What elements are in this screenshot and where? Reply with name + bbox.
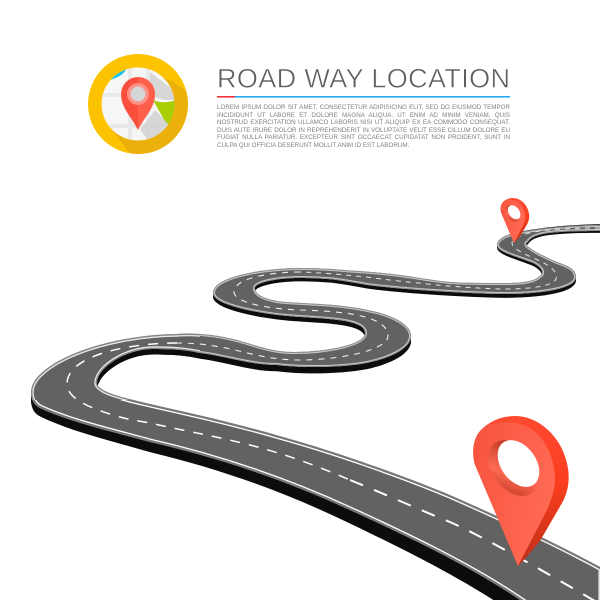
- lane dashes: near section: [350, 480, 600, 600]
- body text: LOREM IPSUM DOLOR SIT AMET, CONSECTETUR ADIPISICING ELIT, SED DO EIUSMOD TEMPOR: [217, 104, 510, 111]
- body text: FUGIAT NULLA PARIATUR. EXCEPTEUR SINT OCCAECAT CUPIDATAT NON PROIDENT, SUNT IN: [217, 134, 510, 141]
- body text: NOSTRUD EXERCITATION ULLAMCO LABORIS NISI UT ALIQUIP EX EA COMMODO CONSEQUAT.: [217, 119, 510, 126]
- body text: DUIS AUTE IRURE DOLOR IN REPREHENDERIT IN VOLUPTATE VELIT ESSE CILLUM DOLORE EU: [217, 126, 510, 134]
- body text: [217, 104, 510, 148]
- title underline: [217, 96, 510, 98]
- winding road: [31, 224, 600, 600]
- lane dashes: middle section: [177, 272, 388, 360]
- body text: CULPA QUI OFFICIA DESERUNT MOLLIT ANIM ID EST LABORUM.: [217, 142, 409, 148]
- icon: map pin badge: [88, 54, 188, 154]
- large map pin: [473, 416, 569, 566]
- body text: INCIDIDUNT UT LABORE ET DOLORE MAGNA ALIQUA. UT ENIM AD MINIM VENIAM, QUIS: [217, 112, 510, 118]
- small map pin: [501, 198, 529, 243]
- lane dashes: lower section: [67, 343, 350, 480]
- lane dashes: far section: [300, 228, 600, 289]
- title: ROAD WAY LOCATION: [217, 63, 510, 93]
